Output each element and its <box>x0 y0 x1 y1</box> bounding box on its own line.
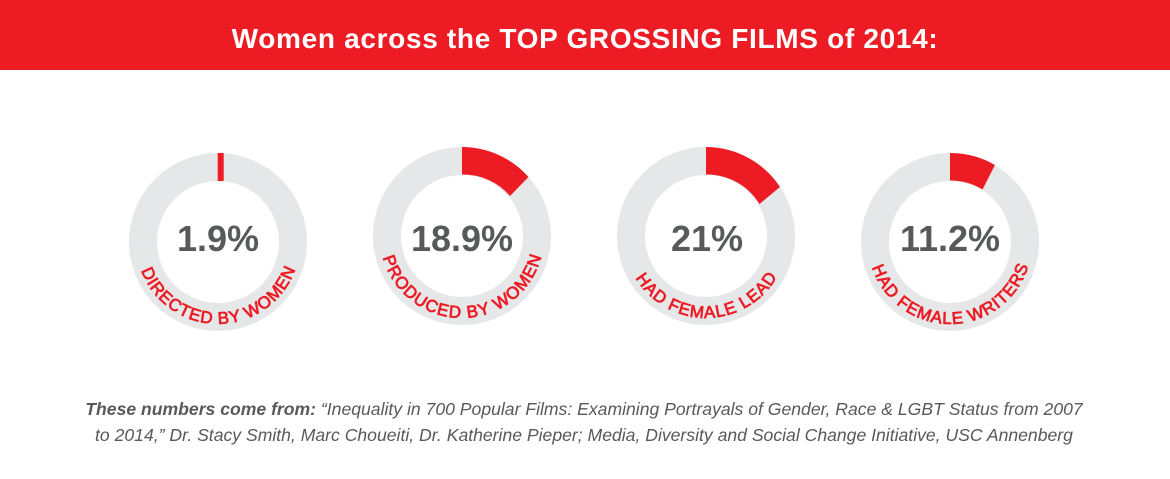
title: Women across the TOP GROSSING FILMS of 2014: <box>232 23 938 54</box>
value: 11.2% <box>900 218 1000 259</box>
donut: had female lead <box>617 147 795 325</box>
red segment <box>950 153 995 190</box>
source note <box>85 399 1084 445</box>
red segment <box>706 147 780 204</box>
value: 21% <box>671 218 743 259</box>
red segment <box>218 153 224 181</box>
curved label: DIRECTED BY WOMEN <box>141 266 296 324</box>
donut: directed by women <box>129 153 307 331</box>
red segment <box>462 147 528 196</box>
value: 18.9% <box>411 218 513 259</box>
value: 1.9% <box>177 218 259 259</box>
header banner <box>0 0 1170 70</box>
donut: produced by women <box>373 147 551 325</box>
source note: to 2014,” Dr. Stacy Smith, Marc Choueiti, Dr. Katherine Pieper; Media, Diversity and Social Change Initiative, USC Annenberg <box>95 425 1073 445</box>
curved label: HAD FEMALE LEAD <box>636 272 775 318</box>
curved label: PRODUCED BY WOMEN <box>382 254 542 318</box>
curved label: HAD FEMALE WRITERS <box>872 264 1028 324</box>
donut: had female writers <box>861 153 1039 331</box>
source note: These numbers come from: “Inequality in 700 Popular Films: Examining Portrayals of Gender, Race & LGBT Status from 2007 <box>85 399 1084 419</box>
